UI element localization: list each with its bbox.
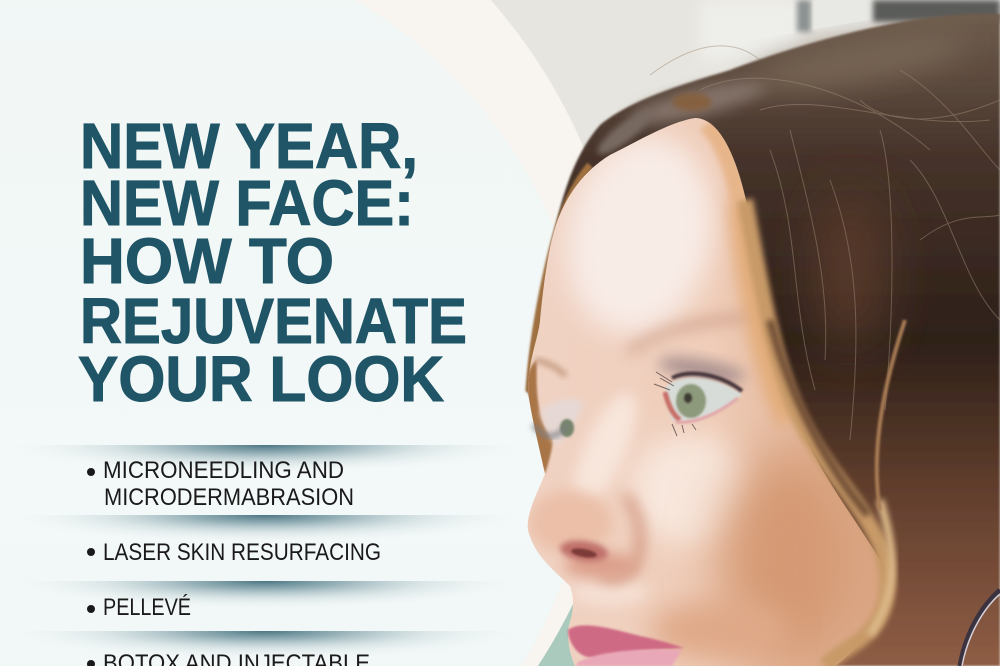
panel: light circle bbox=[0, 0, 592, 666]
green backdrop corner bbox=[500, 600, 620, 666]
blonde hair strand bbox=[745, 200, 905, 666]
list item: microneedling: MICRONEEDLING AND bbox=[103, 457, 344, 484]
heading: HOW TO bbox=[80, 225, 334, 297]
photo: woman in profile bbox=[520, 13, 1000, 666]
hair mass bbox=[527, 13, 1000, 666]
list: treatments bbox=[10, 445, 520, 666]
hoop earring bbox=[960, 590, 1000, 666]
list item: microneedling: MICRODERMABRASION bbox=[104, 484, 354, 511]
list item: laser: LASER SKIN RESURFACING bbox=[103, 539, 381, 566]
heading: NEW FACE: bbox=[80, 167, 414, 239]
heading: YOUR LOOK bbox=[78, 343, 444, 415]
heading: NEW YEAR, bbox=[80, 110, 418, 182]
list item: pelleve: PELLEVÉ bbox=[103, 594, 191, 621]
lips bbox=[568, 625, 684, 666]
hair strands bbox=[650, 46, 1000, 440]
face skin bbox=[520, 110, 900, 666]
cream outer circle bbox=[0, 0, 628, 666]
eyebrow bbox=[628, 318, 745, 352]
near eye bbox=[654, 353, 747, 436]
heading bbox=[78, 110, 467, 415]
heading: REJUVENATE bbox=[80, 285, 467, 357]
list item: microneedling bbox=[87, 457, 354, 511]
far eye bbox=[533, 360, 584, 446]
nostril bbox=[559, 538, 609, 564]
band shadows bbox=[10, 445, 520, 666]
